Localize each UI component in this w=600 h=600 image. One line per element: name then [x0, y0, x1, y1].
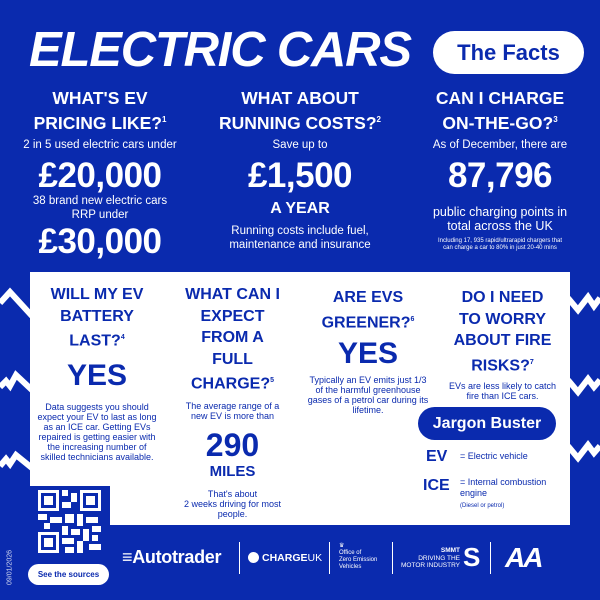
column: pricing: WHAT'S EV [52, 88, 148, 108]
column: charging: Including 17, 935 rapid/ultrarapid chargers that [438, 238, 562, 244]
column: charging: 87,796 [448, 156, 552, 195]
logo: OZEV: Zero Emission [339, 557, 377, 563]
panel: range: The average range of a [186, 401, 279, 411]
panel: battery [37, 286, 157, 462]
column: charging: CAN I CHARGE [436, 88, 564, 108]
column: running costs: Running costs include fuel, [231, 225, 369, 237]
logo: OZEV: Office of [339, 550, 361, 556]
panel: fire risks: DO I NEED [462, 289, 543, 306]
column: charging: total across the UK [447, 219, 553, 233]
column: charging: can charge a car to 80% in just 20-40 mins [443, 245, 557, 251]
jargon: EV: = Electric vehicle [460, 451, 528, 461]
column: charging [432, 88, 567, 251]
logos [122, 542, 542, 574]
column: pricing: £30,000 [38, 222, 162, 261]
panel: range: people. [218, 509, 247, 519]
panel: battery: BATTERY [60, 308, 134, 324]
panel: range: EXPECT [200, 308, 264, 324]
jargon: ICE: (Diesel or petrol) [460, 503, 504, 509]
panel: greener: YES [338, 337, 398, 370]
panel: range: CHARGE?5 [191, 375, 274, 392]
jargon: ICE: = Internal combustion [460, 477, 546, 487]
panel: greener [308, 289, 428, 415]
column: running costs: £1,500 [248, 156, 352, 195]
panel: battery: LAST?4 [69, 332, 125, 349]
QR code [38, 490, 101, 553]
panel: range: WHAT CAN I [185, 286, 280, 303]
panel: range: MILES [210, 463, 255, 480]
column: pricing: RRP under [72, 209, 128, 221]
panel: range: That's about [208, 489, 257, 499]
panel: range: FROM A [201, 329, 264, 346]
logo: AA: AA [505, 542, 541, 573]
panel: battery: Data suggests you should expect your EV to last as long as an ICE car. Getting EVs repaired is getting easier with the increasing number of skilled technicians available. [37, 402, 157, 462]
jargon buster pill: Jargon Buster [433, 415, 541, 432]
date: 09/01/2026 [6, 550, 14, 585]
pill: The Facts: The Facts [457, 40, 560, 65]
panel: greener: Typically an EV emits just 1/3 of the harmful greenhouse gases of a petrol car during its lifetime. [308, 375, 428, 415]
jargon: EV: EV [426, 448, 447, 465]
panel: range [184, 286, 281, 519]
jargon buster pill [418, 407, 556, 440]
button: see the sources: See the sources [38, 570, 99, 579]
logo: OZEV: Vehicles [339, 564, 361, 570]
panel: fire risks: fire than ICE cars. [466, 391, 539, 401]
logo: OZEV [339, 542, 377, 570]
column: pricing: £20,000 [38, 156, 162, 195]
panel: fire risks: TO WORRY [459, 310, 546, 328]
panel: range: FULL [212, 350, 253, 368]
logo: Autotrader: ≡Autotrader [122, 547, 221, 567]
panel: range: new EV is more than [191, 411, 274, 421]
column: charging: ON-THE-GO?3 [442, 113, 558, 133]
panel: range: 2 weeks driving for most [184, 499, 281, 509]
column: running costs: WHAT ABOUT [241, 88, 359, 108]
column: charging: public charging points in [433, 205, 567, 219]
logos: S [463, 542, 480, 572]
jargon: ICE: engine [460, 488, 487, 498]
column: running costs: A YEAR [270, 200, 330, 217]
column: pricing: PRICING LIKE?1 [34, 113, 166, 133]
panel: fire risks: ABOUT FIRE [454, 332, 551, 349]
jargon: EV [426, 448, 528, 465]
panel: battery: YES [67, 359, 127, 392]
panel: fire risks: EVs are less likely to catch [449, 381, 556, 391]
jargon: ICE [423, 477, 546, 509]
logo: SMMT: MOTOR INDUSTRY [401, 562, 460, 569]
column: running costs: maintenance and insurance [229, 239, 371, 251]
panel: fire risks: RISKS?7 [471, 357, 534, 374]
button: see the sources [28, 564, 109, 585]
panel: greener: ARE EVS [333, 289, 403, 306]
pill: The Facts [433, 31, 584, 74]
panel: range: 290 [206, 427, 259, 463]
jargon: ICE: ICE [423, 477, 450, 494]
title: ELECTRIC CARS [29, 23, 411, 77]
logo: OZEV: ♛ [339, 543, 344, 549]
column: pricing: 2 in 5 used electric cars under [23, 139, 177, 151]
column: pricing [23, 88, 177, 261]
panel: greener: GREENER?6 [322, 314, 414, 331]
panel: fire risks [449, 289, 556, 401]
column: running costs: Save up to [272, 139, 327, 151]
logo: SMMT [401, 547, 460, 569]
column: running costs: RUNNING COSTS?2 [219, 113, 381, 133]
panel: battery: WILL MY EV [51, 286, 143, 303]
column: charging: As of December, there are [433, 139, 567, 151]
column: running costs [219, 88, 381, 251]
logo: ChargeUK: CHARGEUK [262, 552, 322, 564]
column: pricing: 38 brand new electric cars [33, 195, 167, 207]
logo: SMMT: DRIVING THE [418, 554, 460, 562]
logo: SMMT: SMMT [441, 547, 460, 554]
